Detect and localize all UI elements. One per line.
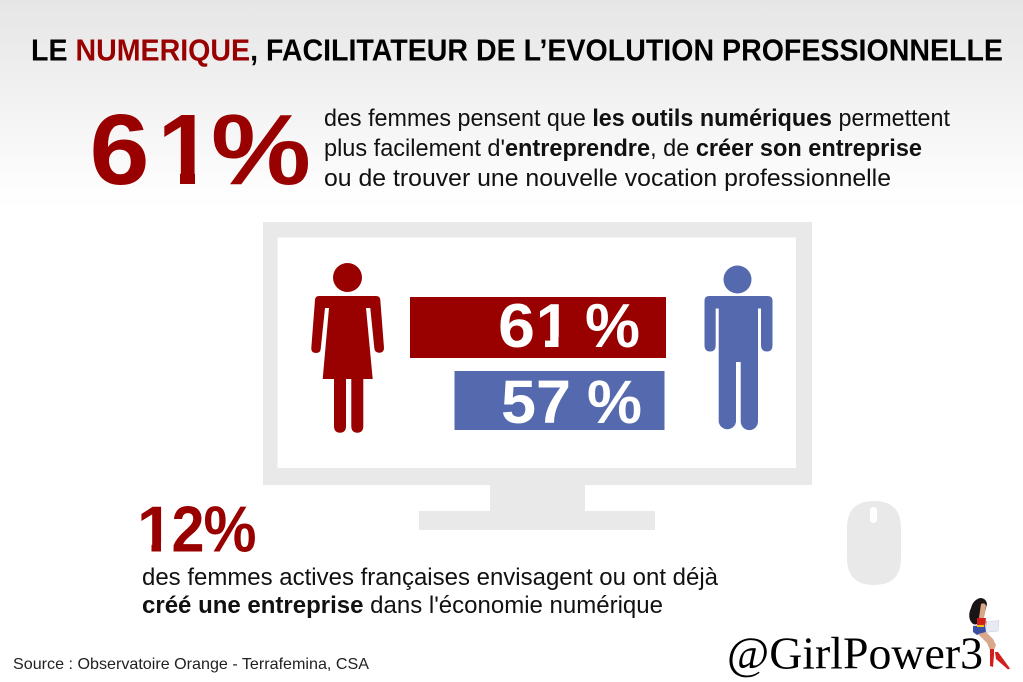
secondary stat: 12% (141, 506, 255, 552)
icon: man (704, 266, 772, 430)
bar: women 61%: % (585, 292, 640, 361)
icon: mouse (847, 501, 901, 585)
icon: woman (311, 263, 384, 433)
secondary stat: 12%: 1 (137, 492, 173, 566)
bar: men 57%: % (587, 368, 642, 436)
secondary description: des femmes actives françaises envisagent ou ont déjà (142, 564, 718, 591)
headline stat: 61%: 6 (90, 94, 150, 206)
bar: men 57%: 57 (501, 368, 571, 436)
secondary stat: 12%: 2 (172, 492, 204, 566)
bar: men 57% (454, 368, 664, 436)
bar: women 61% (410, 297, 666, 358)
headline description: ou de trouver une nouvelle vocation professionnelle (324, 165, 891, 192)
headline stat: 61% (93, 114, 308, 185)
secondary description: créé une entreprise dans l'économie numérique (142, 592, 663, 619)
brand handle: @GirlPower3 (727, 628, 983, 678)
headline stat: 61%: 1 (158, 94, 213, 206)
headline description (324, 105, 950, 192)
bar: women 61%: 1 (536, 292, 570, 361)
headline description: plus facilement d'entreprendre, de créer son entreprise (324, 135, 922, 162)
source: Source : Observatoire Orange - Terrafemina, CSA (13, 656, 369, 673)
headline stat: 61%: % (211, 94, 311, 206)
headline description: des femmes pensent que les outils numériques permettent (324, 105, 950, 132)
secondary description (142, 564, 718, 619)
bar: women 61%: 6 (498, 292, 535, 361)
icon: heroine mascot (969, 598, 1010, 670)
monitor illustration (263, 222, 812, 530)
secondary stat: 12%: % (204, 492, 256, 566)
